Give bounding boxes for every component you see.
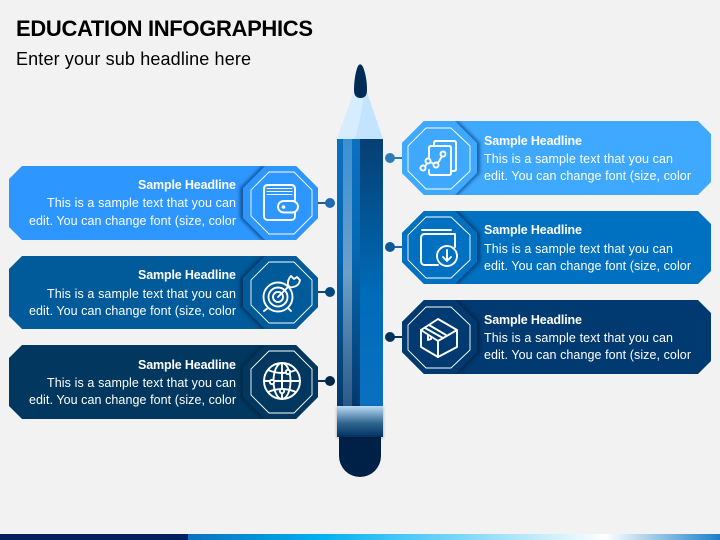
icon: target [264,276,300,312]
body text: edit. You can change font (size, color [29,393,236,407]
body text: This is a sample text that you can [47,376,236,390]
pencil wood tip [337,92,383,139]
octagon shadow [240,256,318,329]
octagon badge [402,121,477,195]
icon: globe [264,363,300,399]
panel body [402,300,711,374]
connector [317,376,335,386]
pencil ferrule band [337,406,383,437]
panel body [9,166,318,240]
subtitle: Enter your sub headline here [16,49,251,69]
body text: This is a sample text that you can [484,331,673,345]
octagon shadow [240,166,318,240]
panel: left 2 [9,256,335,329]
icon: box [421,319,457,357]
headline: Sample Headline [138,358,236,372]
octagon badge [243,256,318,329]
pencil lead [354,64,367,98]
octagon shadow [402,121,480,195]
panel: right 1 [385,121,711,195]
body text [29,376,236,407]
headline: Sample Headline [138,268,236,282]
octagon shadow [240,345,264,419]
octagon outline [251,172,312,234]
connector [385,153,403,163]
body text: This is a sample text that you can [47,196,236,210]
headline: Sample Headline [138,178,236,192]
icon: documents chart [420,141,456,175]
octagon shadow [402,211,480,284]
octagon badge [402,211,477,284]
icon: book download [421,230,457,266]
octagon outline [408,217,470,278]
panel body [402,121,711,195]
panel: left 3 [9,345,335,419]
body text: edit. You can change font (size, color [484,259,691,273]
connector [317,287,335,297]
body text [29,196,236,228]
pencil [337,64,383,477]
body text: edit. You can change font (size, color [484,348,691,362]
octagon outline [251,351,312,413]
octagon outline [408,128,470,189]
octagon outline [251,262,312,323]
octagon badge [243,345,318,419]
pencil eraser [339,436,381,477]
panel: left 1 [9,166,335,240]
body text: edit. You can change font (size, color [484,169,691,183]
panel: right 2 [385,211,711,284]
octagon shadow [402,300,480,374]
body text: edit. You can change font (size, color [29,304,236,318]
headline: Sample Headline [484,313,582,327]
headline: Sample Headline [484,134,582,148]
octagon badge [243,166,318,240]
body text [484,242,691,273]
panel body [9,256,318,329]
octagon badge [402,300,477,374]
body text: This is a sample text that you can [47,287,236,301]
connector [317,198,335,208]
body text: This is a sample text that you can [484,242,673,256]
connector [385,332,403,342]
body text [484,152,691,183]
pencil body [337,139,383,406]
panel body [9,345,318,419]
body text: edit. You can change font (size, color [29,214,236,228]
body text: This is a sample text that you can [484,152,673,166]
panel body [402,211,711,284]
connector [385,242,403,252]
footer bar [0,534,720,540]
icon: wallet [264,185,298,220]
title: EDUCATION INFOGRAPHICS [16,16,313,41]
panel: right 3 [385,300,711,374]
octagon outline [408,307,470,368]
headline: Sample Headline [484,223,582,237]
body text [484,331,691,362]
body text [29,287,236,318]
